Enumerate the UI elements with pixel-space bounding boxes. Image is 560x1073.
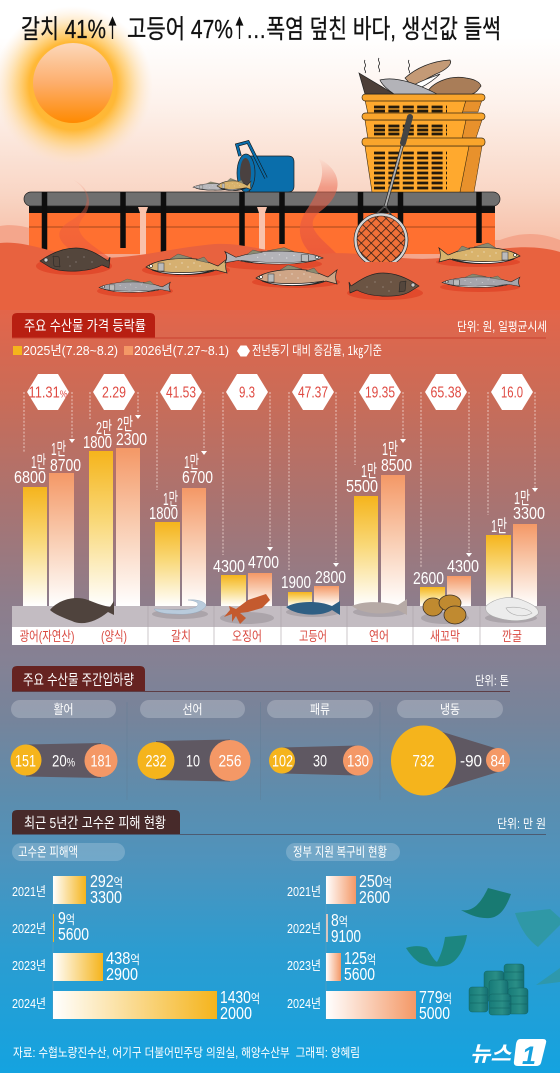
icon: coin stacks bbox=[469, 964, 528, 1015]
left panel: damage amount: 2900 bbox=[106, 964, 138, 984]
left panel: damage amount: 292억 bbox=[90, 871, 123, 891]
price value labels: 1만 bbox=[361, 461, 377, 481]
left panel: damage amount: 9억 bbox=[58, 908, 75, 928]
price chart heading tab: 주요 수산물 가격 등락률 bbox=[24, 318, 146, 335]
product label strip: 갈치 bbox=[171, 629, 191, 644]
steam right bbox=[300, 158, 338, 255]
hexagon badges: 41.53 bbox=[166, 384, 196, 402]
price value labels: 2300 bbox=[116, 429, 147, 449]
price value labels: 1만 bbox=[51, 439, 66, 459]
bubble: shellfish bbox=[269, 746, 373, 776]
bubble: fresh fish: 232 bbox=[146, 752, 166, 770]
title bbox=[21, 14, 501, 44]
bubble: frozen: 732 bbox=[412, 752, 434, 770]
price value labels: 1만 bbox=[514, 488, 530, 508]
price value labels: 1900 bbox=[281, 572, 311, 592]
price value labels: 2만 bbox=[117, 414, 133, 434]
landing net bbox=[356, 117, 410, 266]
right panel: government recovery: 5000 bbox=[419, 1003, 450, 1023]
price value labels bbox=[14, 414, 545, 592]
landings unit note: 단위: 톤 bbox=[475, 674, 509, 688]
price value labels: 1만 bbox=[491, 516, 507, 536]
price value labels: 1만 bbox=[184, 452, 199, 472]
product label strip: 연어 bbox=[369, 629, 389, 644]
left panel: damage amount: 5600 bbox=[58, 924, 89, 944]
title: 고등어 47% bbox=[127, 14, 233, 44]
legend: 전년동기 대비 증감률, 1㎏기준 bbox=[252, 343, 382, 359]
damage heading tab bbox=[12, 810, 546, 835]
bubble: fresh fish bbox=[138, 740, 250, 782]
price value labels: 3300 bbox=[513, 503, 545, 523]
price value labels: 2만 bbox=[96, 418, 112, 438]
right panel: government recovery: 250억 bbox=[359, 871, 392, 891]
price chart heading tab bbox=[12, 313, 546, 338]
left panel: damage amount: 2000 bbox=[220, 1003, 252, 1023]
category pills: 활어 bbox=[54, 702, 74, 717]
damage heading tab: 최근 5년간 고수온 피해 현황 bbox=[24, 815, 166, 832]
fish in basket bbox=[359, 58, 481, 94]
bubble: frozen: 84 bbox=[490, 752, 506, 770]
product label strip: 새꼬막 bbox=[430, 629, 460, 644]
hexagon badges: 19.35 bbox=[365, 384, 395, 402]
icons: seafood products bbox=[50, 594, 538, 624]
hexagon badges: 11.31% bbox=[28, 384, 68, 402]
hexagon badges bbox=[27, 374, 533, 410]
legend: 2026년(7.27~8.1) bbox=[134, 343, 229, 358]
left panel: damage amount bbox=[12, 843, 260, 1023]
sun bbox=[0, 6, 153, 166]
dotted connectors bbox=[24, 392, 538, 570]
price value labels: 6800 bbox=[14, 467, 46, 487]
bubble: live fish bbox=[10, 743, 118, 778]
bubble: fresh fish: 256 bbox=[218, 752, 242, 770]
bubble: shellfish: 30 bbox=[313, 752, 327, 770]
product label strip: 고등어 bbox=[299, 629, 327, 644]
product label strip: 광어(자연산) bbox=[20, 629, 74, 644]
back sea wave bbox=[0, 225, 560, 310]
right panel: government recovery: 779억 bbox=[419, 987, 452, 1007]
product label strip: (양식) bbox=[101, 629, 127, 644]
price value labels: 1800 bbox=[83, 432, 112, 452]
left panel: damage amount: 3300 bbox=[90, 887, 122, 907]
price value labels: 8500 bbox=[381, 455, 412, 475]
bubble: fresh fish: 10 bbox=[186, 752, 200, 770]
bucket bbox=[237, 142, 294, 192]
illustration: overheated sea bbox=[0, 6, 560, 310]
legend: 2025년(7.28~8.2) bbox=[23, 343, 118, 358]
bubble: live fish: 151 bbox=[15, 752, 36, 770]
right panel: government recovery: 2022년 bbox=[287, 921, 321, 936]
bubble: shellfish: 130 bbox=[347, 752, 369, 770]
bubble: frozen bbox=[391, 726, 510, 796]
bubble: live fish: 181 bbox=[90, 752, 112, 770]
section: high water temperature damage bbox=[12, 810, 560, 1023]
hexagon badges: 9.3 bbox=[239, 384, 255, 402]
category pills: 선어 bbox=[182, 702, 202, 717]
price value labels: 4700 bbox=[248, 552, 279, 572]
right panel: government recovery bbox=[286, 843, 452, 1023]
price value labels: 4300 bbox=[447, 556, 479, 576]
section: price chart bbox=[12, 313, 547, 645]
fish at bucket bbox=[193, 178, 251, 191]
right panel: government recovery: 2024년 bbox=[287, 996, 321, 1011]
price value labels: 1만 bbox=[163, 489, 178, 509]
left panel: damage amount: 2024년 bbox=[12, 996, 46, 1011]
right panel: government recovery: 정부 지원 복구비 현황 bbox=[293, 844, 387, 860]
fish baskets bbox=[362, 94, 485, 192]
product label strip: 오징어 bbox=[232, 629, 262, 644]
hexagon badges: 2.29 bbox=[102, 384, 126, 402]
left panel: damage amount: 고수온 피해액 bbox=[18, 844, 78, 860]
category pills: 냉동 bbox=[440, 702, 460, 717]
bubble: frozen: -90 bbox=[460, 752, 482, 770]
product label strip: 깐굴 bbox=[502, 629, 522, 644]
right panel: government recovery: 125억 bbox=[344, 948, 376, 968]
product label strip bbox=[12, 606, 546, 645]
right panel: government recovery: 2600 bbox=[359, 887, 390, 907]
price value labels: 2600 bbox=[413, 568, 444, 588]
right panel: government recovery: 9100 bbox=[331, 926, 361, 946]
steam left bbox=[59, 178, 110, 258]
price value labels: 2800 bbox=[315, 567, 346, 587]
price value labels: 6700 bbox=[182, 467, 213, 487]
bubble: live fish: 20% bbox=[52, 752, 75, 770]
section: weekly landings bbox=[10, 666, 510, 800]
hexagon badges: 16.0 bbox=[501, 384, 523, 402]
title: 갈치 41% bbox=[21, 14, 106, 44]
left panel: damage amount: 438억 bbox=[106, 948, 140, 968]
right panel: government recovery: 2021년 bbox=[287, 884, 321, 899]
hexagon badges: 47.37 bbox=[298, 384, 328, 402]
landings heading tab: 주요 수산물 주간입하량 bbox=[23, 672, 134, 689]
logo: News1: 뉴스 bbox=[470, 1043, 512, 1066]
logo: News1: 1 bbox=[522, 1042, 536, 1070]
right panel: government recovery: 2023년 bbox=[287, 958, 321, 973]
left panel: damage amount: 2021년 bbox=[12, 884, 46, 899]
price value labels: 1800 bbox=[149, 503, 178, 523]
bubble: shellfish: 102 bbox=[272, 752, 293, 770]
price value labels: 1만 bbox=[382, 439, 398, 459]
left panel: damage amount: 2023년 bbox=[12, 958, 46, 973]
source line: 자료: 수협노량진수산, 어기구 더불어민주당 의원실, 해양수산부 그래픽: 양혜림 bbox=[13, 1046, 360, 1060]
price value labels: 8700 bbox=[50, 455, 81, 475]
fish farm cage bbox=[24, 192, 500, 255]
logo: News1 bbox=[470, 1039, 546, 1070]
landings heading tab bbox=[12, 666, 510, 692]
legend bbox=[13, 343, 382, 359]
icon: falling money bbox=[406, 888, 560, 985]
bar chart: prices bbox=[23, 448, 537, 606]
sea fish group bbox=[36, 243, 520, 300]
price value labels: 1만 bbox=[31, 452, 46, 472]
left panel: damage amount: 2022년 bbox=[12, 921, 46, 936]
right panel: government recovery: 5600 bbox=[344, 964, 375, 984]
damage unit note: 단위: 만 원 bbox=[497, 817, 546, 831]
price value labels: 5500 bbox=[346, 476, 378, 496]
category pills: 패류 bbox=[310, 702, 330, 717]
category pills bbox=[11, 700, 503, 800]
right panel: government recovery: 8억 bbox=[331, 910, 348, 930]
front sea bbox=[0, 243, 560, 310]
left panel: damage amount: 1430억 bbox=[220, 987, 260, 1007]
price value labels: 4300 bbox=[213, 556, 245, 576]
hexagon badges: 65.38 bbox=[430, 384, 462, 402]
price unit note: 단위: 원, 일평균시세 bbox=[457, 320, 547, 334]
